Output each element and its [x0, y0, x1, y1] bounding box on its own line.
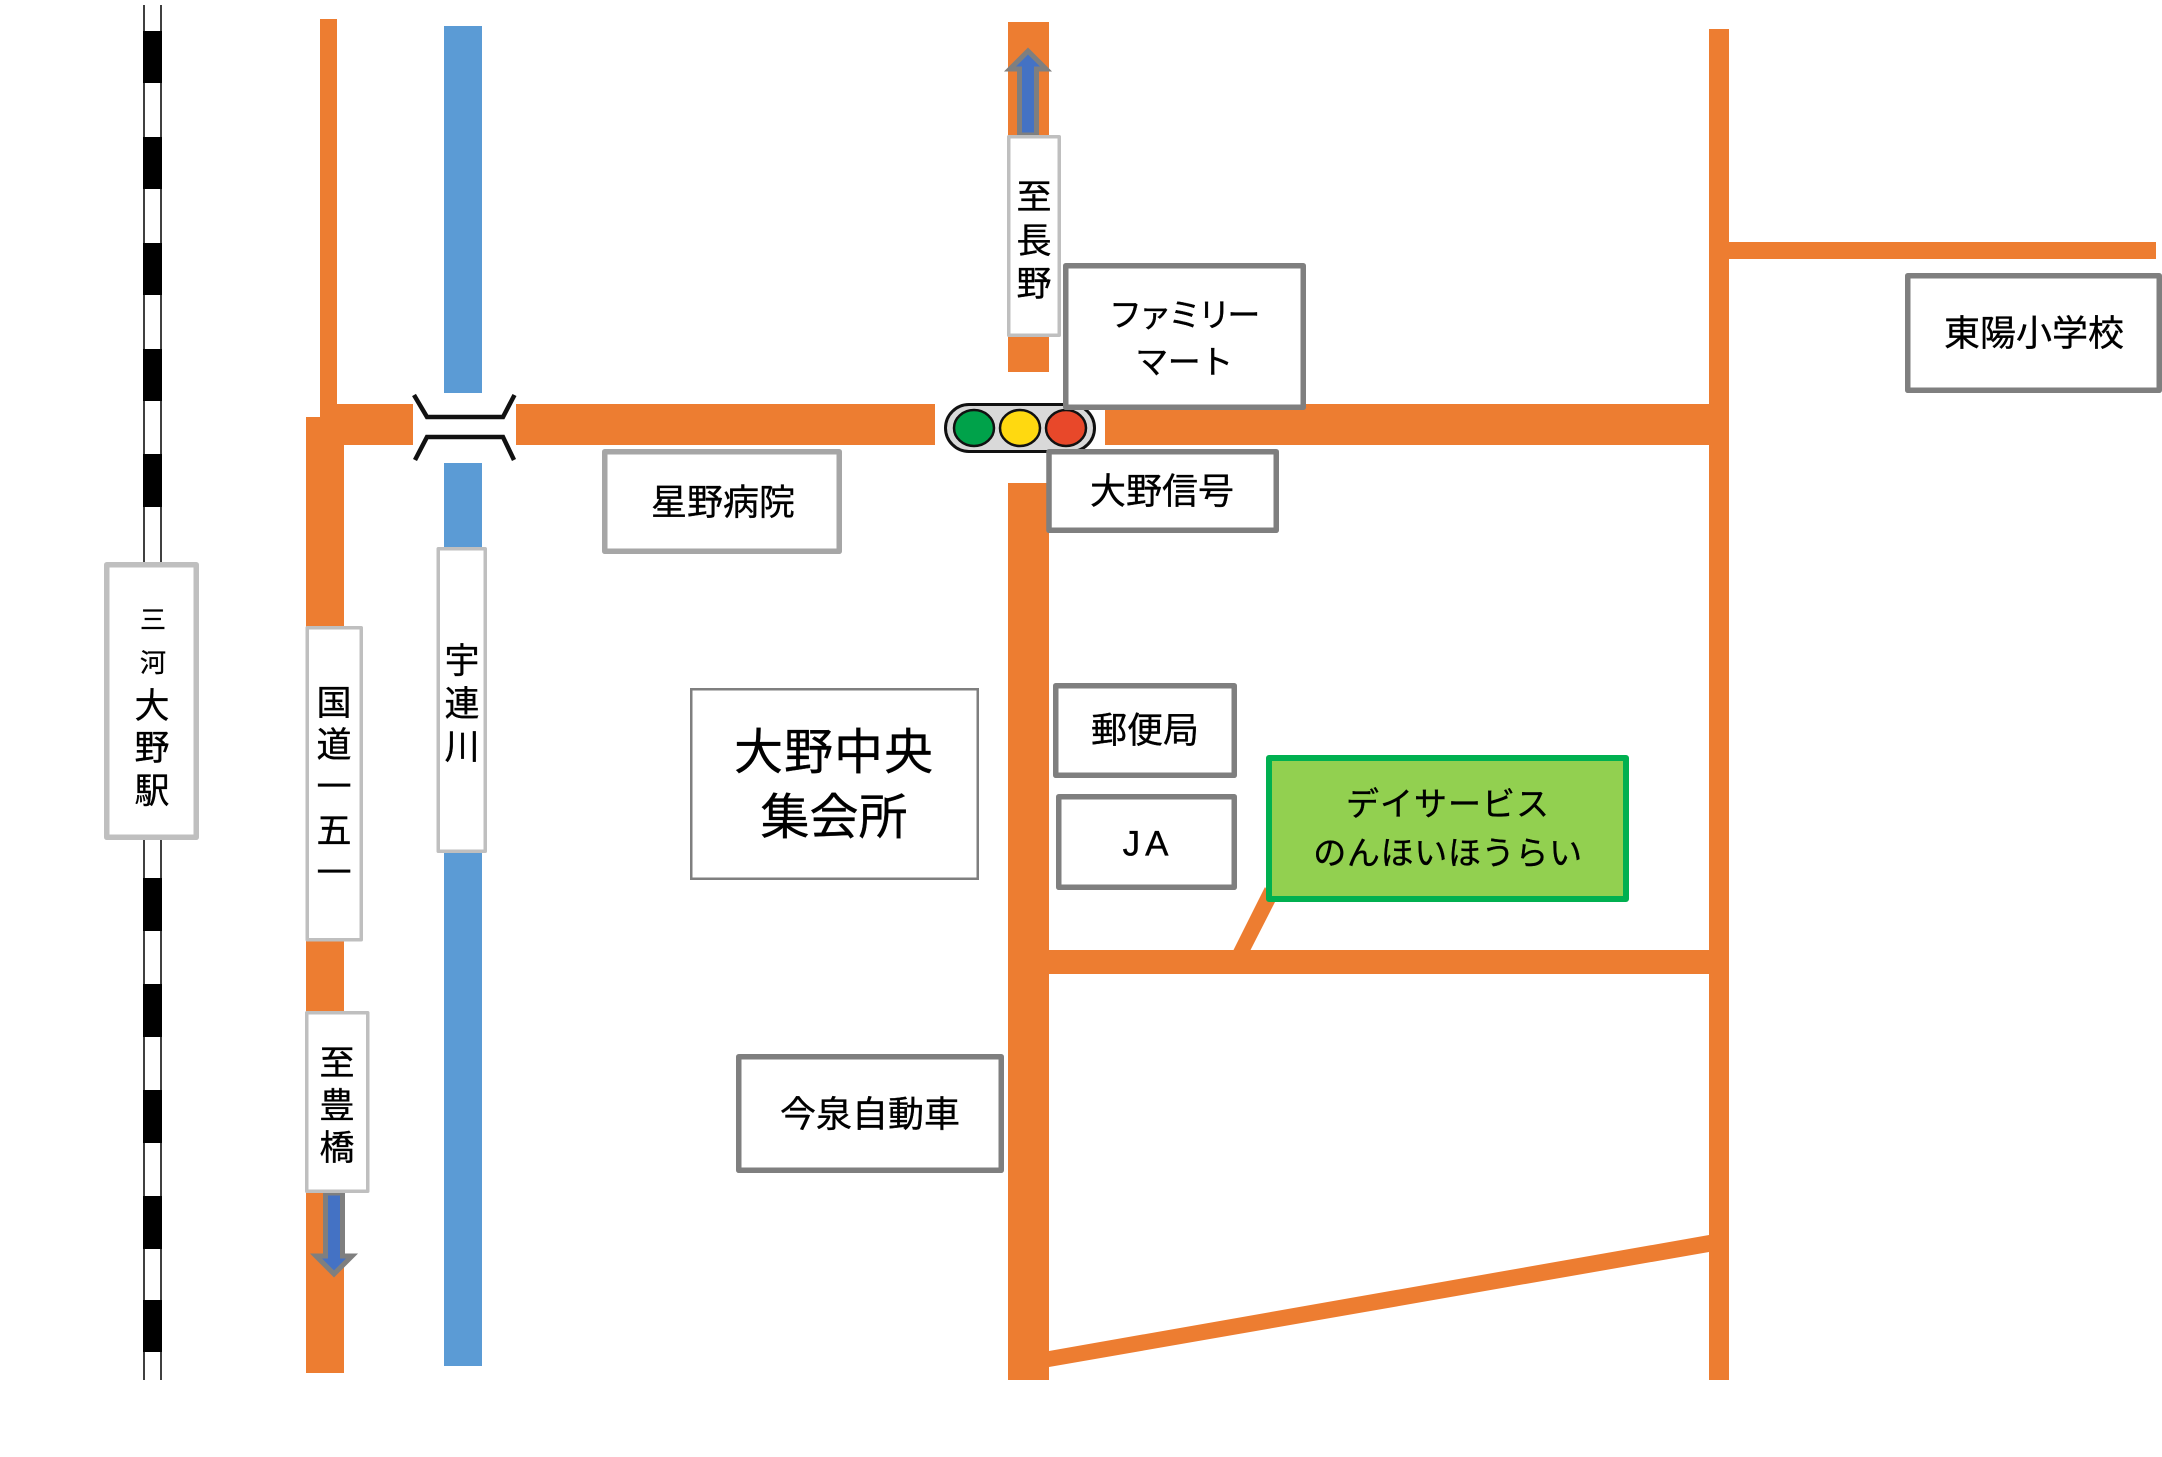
label: 至長野: 至 [1016, 178, 1052, 216]
landmark: Hoshino hospital [605, 452, 839, 551]
road: lane to day service [1049, 887, 1709, 974]
destination: day service Nonhoi Horai: デイサービス [1346, 786, 1550, 822]
station label: 三河大野駅: 駅 [134, 772, 170, 810]
river label: 宇連川 [438, 549, 485, 851]
railway line [143, 5, 162, 1380]
label: 至豊橋: 豊 [319, 1086, 355, 1126]
destination: day service Nonhoi Horai [1269, 758, 1626, 899]
landmark: post office: 郵便局 [1091, 710, 1199, 750]
label: 至豊橋: 橋 [319, 1128, 355, 1168]
arrow: to Nagano [1010, 51, 1046, 135]
road label: 国道一五一: 道 [316, 726, 352, 764]
label: 至豊橋 [307, 1013, 368, 1191]
label: 至豊橋: 至 [319, 1044, 355, 1082]
road: east vertical road [1709, 29, 1729, 1380]
landmark: Toyo elementary school [1908, 276, 2159, 390]
landmark: Ono signal [1049, 452, 1276, 530]
landmark: Ono signal: 大野信号 [1090, 470, 1234, 512]
river: Ure river [444, 26, 482, 1366]
landmark: Ono central meeting hall: 大野中央 [734, 726, 934, 780]
river label: 宇連川: 連 [444, 684, 480, 724]
road: east-west main road [320, 404, 1715, 445]
landmark: JA [1059, 797, 1234, 887]
label: 至長野: 野 [1016, 264, 1052, 304]
label: 至長野 [1009, 137, 1059, 335]
bridge symbol [414, 395, 514, 460]
station label: 三河大野駅: 河 [140, 648, 166, 678]
station label: 三河大野駅: 大 [134, 686, 170, 726]
landmark: Family Mart: ファミリー [1109, 296, 1257, 334]
road: north-east branch [1729, 242, 2156, 259]
station label: 三河大野駅 [107, 565, 196, 837]
landmark: post office [1056, 686, 1234, 775]
landmark: Imaizumi Motors [739, 1057, 1001, 1170]
road label: 国道一五一: 一 [316, 854, 352, 892]
road label: 国道一五一: 五 [316, 812, 352, 850]
road label: 国道一五一: 一 [316, 768, 352, 806]
landmark: Family Mart [1066, 266, 1303, 407]
road: diagonal south road [1049, 1235, 1709, 1367]
river label: 宇連川: 川 [444, 728, 480, 766]
road: national route 151 [306, 19, 344, 1373]
river label: 宇連川: 宇 [444, 642, 480, 680]
destination: day service Nonhoi Horai: のんほいほうらい [1313, 834, 1583, 872]
landmark: Family Mart: マート [1135, 344, 1233, 380]
landmark: JA: JA [1123, 824, 1173, 864]
landmark: Ono central meeting hall [691, 689, 978, 879]
station label: 三河大野駅: 野 [134, 728, 170, 768]
arrow: to Toyohashi [316, 1193, 352, 1274]
road label: 国道一五一 [307, 628, 361, 940]
label: 至長野: 長 [1016, 222, 1052, 260]
station label: 三河大野駅: 三 [140, 605, 166, 635]
landmark: Toyo elementary school: 東陽小学校 [1944, 312, 2124, 354]
landmark: Ono central meeting hall: 集会所 [760, 791, 908, 845]
traffic signal [946, 404, 1094, 452]
road label: 国道一五一: 国 [316, 684, 352, 722]
road: north-south central road [1008, 22, 1049, 1380]
landmark: Imaizumi Motors: 今泉自動車 [780, 1094, 960, 1134]
landmark: Hoshino hospital: 星野病院 [651, 482, 795, 522]
